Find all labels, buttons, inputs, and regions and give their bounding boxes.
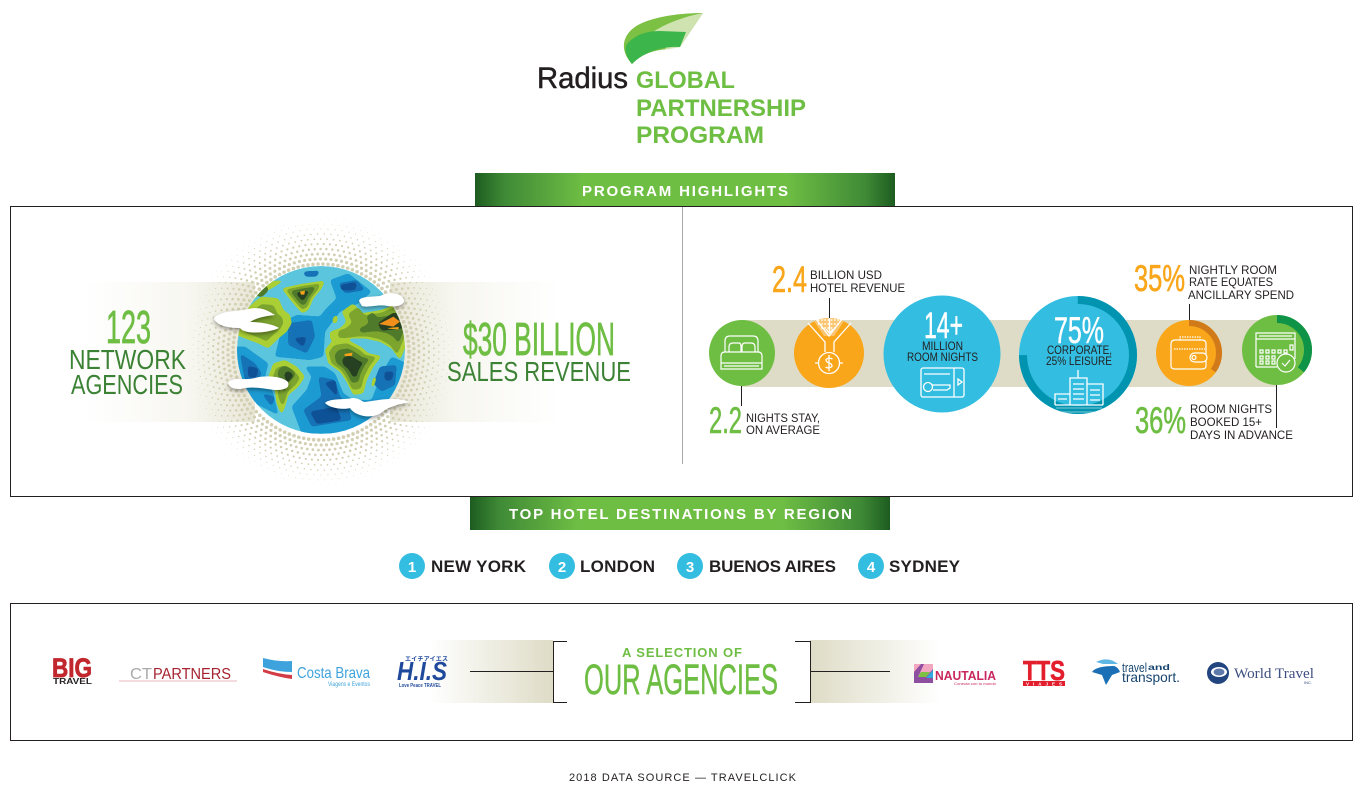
stat: booked in advance: [1135, 315, 1312, 442]
stat: booked in advance: DAYS IN ADVANCE: [1190, 428, 1293, 442]
stat: 123 network agencies: 123: [106, 301, 151, 353]
heading: program highlights: [475, 173, 895, 206]
heading: top hotel destinations: TOP HOTEL DESTINATIONS BY REGION: [509, 506, 852, 523]
destination: London: LONDON: [580, 557, 655, 576]
stat: million room nights: [884, 296, 1000, 412]
stat: 30 billion sales revenue: SALES REVENUE: [447, 356, 631, 387]
program name: PROGRAM: [636, 122, 764, 149]
stat: nights stay: NIGHTS STAY,: [746, 411, 820, 425]
panel: agencies frame: [10, 604, 1352, 740]
destination: Buenos Aires: BUENOS AIRES: [709, 557, 836, 576]
logo: HIS: Love Peace TRAVEL: [399, 683, 441, 689]
stat: hotel revenue: 2.4: [772, 259, 807, 300]
stat: million room nights: ROOM NIGHTS: [907, 350, 978, 364]
logo: Nautalia: [914, 664, 997, 686]
icon: bed: [721, 336, 762, 369]
logo: Costa Brava: Costa Brava: [297, 665, 370, 682]
logo swoosh: [624, 13, 703, 64]
destination list: [399, 553, 961, 579]
stat: million room nights: MILLION: [922, 339, 963, 353]
wordmark Radius: Radius: [537, 62, 628, 95]
logo: Nautalia: NAUTALIA: [935, 668, 997, 683]
destination: Buenos Aires: 3: [686, 559, 694, 576]
logo: Travel and Transport: and: [1148, 663, 1170, 672]
stat: 123 network agencies: NETWORK: [69, 344, 186, 375]
globe: [235, 266, 412, 434]
globe illustration: [141, 220, 502, 484]
stat: hotel revenue: [772, 259, 905, 388]
logo: HIS: H.I.S: [397, 656, 448, 686]
logo: Big Travel: TRAVEL: [53, 677, 92, 686]
agencies centre heading: [430, 640, 940, 704]
continents: [237, 280, 412, 415]
stat: nights stay: 2.2: [709, 400, 742, 441]
stat: million room nights: 14+: [924, 305, 963, 346]
stat: nights stay: ON AVERAGE: [746, 423, 820, 437]
stat: hotel revenue: BILLION USD: [810, 268, 882, 282]
logo: World Travel: INC.: [1304, 680, 1312, 685]
stat: corporate leisure: 25% LEISURE: [1046, 354, 1112, 368]
footer: data source: 2018 DATA SOURCE — TRAVELCLICK: [569, 772, 797, 784]
panel: program highlights frame: [10, 206, 1352, 496]
icon: buildings: [1055, 370, 1103, 412]
logo: Radius Global Partnership Program: [537, 13, 806, 149]
stat: hotel revenue: HOTEL REVENUE: [810, 281, 905, 295]
destination: New York: [399, 553, 527, 579]
destination: New York: 1: [408, 559, 416, 576]
logo: HIS: エイチアイエス: [405, 655, 448, 663]
stat: corporate leisure: [1019, 296, 1137, 414]
halftone band: [83, 282, 560, 422]
dotted funnel mouth: [814, 318, 844, 336]
stat: ancillary spend: ANCILLARY SPEND: [1188, 288, 1294, 302]
destination: London: 2: [558, 559, 566, 576]
logo: World Travel: [1207, 662, 1314, 685]
stat: nights stay: [709, 320, 820, 441]
heading: top hotel destinations: [470, 497, 890, 530]
program name: PARTNERSHIP: [636, 95, 806, 122]
halftone dots: [189, 220, 453, 484]
stat: corporate leisure: 75%: [1054, 310, 1104, 351]
program name: [636, 67, 806, 149]
icon: key card: [921, 368, 964, 397]
logo: World Travel: World Travel: [1234, 666, 1314, 682]
logo: Nautalia: Conecta con tu mundo: [954, 681, 997, 686]
stat: ancillary spend: RATE EQUATES: [1189, 275, 1273, 289]
stat: booked in advance: ROOM NIGHTS: [1190, 402, 1272, 416]
stat: ancillary spend: NIGHTLY ROOM: [1189, 263, 1277, 277]
logo: Travel and Transport: transport.: [1122, 669, 1180, 685]
stat: 30 billion sales revenue: [447, 313, 631, 387]
destination: London: [549, 553, 655, 579]
stat: ancillary spend: 35%: [1134, 258, 1185, 299]
logo: Big Travel: BIG: [52, 653, 92, 683]
agencies centre heading: OUR AGENCIES: [584, 656, 778, 704]
stat: 123 network agencies: [69, 301, 186, 400]
logo: Costa Brava: Viagens e Eventos: [328, 682, 370, 688]
logo: CT Partners: CT: [130, 666, 152, 683]
icon: wallet: [1171, 337, 1207, 369]
destination: New York: NEW YORK: [431, 557, 527, 576]
stat: booked in advance: BOOKED 15+: [1190, 415, 1262, 429]
destination: Sydney: [858, 553, 961, 579]
icon: dollar funnel: [808, 318, 851, 374]
ocean depth layers: [235, 271, 407, 433]
logo: TTS Viajes: VIAJES: [1026, 682, 1062, 686]
icon: calendar: [1256, 333, 1295, 372]
agencies centre heading: A SELECTION OF: [622, 645, 742, 660]
logo: Costa Brava: [263, 658, 370, 688]
clouds: [214, 293, 410, 416]
destination: Buenos Aires: [677, 553, 836, 579]
destination: Sydney: 4: [867, 559, 876, 576]
destination: Sydney: SYDNEY: [889, 557, 961, 576]
logo: Travel and Transport: travel: [1122, 660, 1147, 675]
logo: Travel and Transport: [1092, 659, 1180, 685]
program name: GLOBAL: [636, 67, 735, 94]
stat: ancillary spend: [1134, 258, 1294, 386]
logo: TTS Viajes: TTS: [1023, 655, 1065, 686]
stat: 30 billion sales revenue: $30 BILLION: [463, 313, 615, 365]
heading: program highlights: PROGRAM HIGHLIGHTS: [582, 183, 788, 200]
metrics ribbon: [742, 320, 1277, 387]
stat: booked in advance: 36%: [1135, 400, 1186, 441]
logo: CT Partners: PARTNERS: [153, 666, 231, 683]
stat: corporate leisure: CORPORATE,: [1047, 343, 1112, 357]
stat: 123 network agencies: AGENCIES: [71, 369, 183, 400]
